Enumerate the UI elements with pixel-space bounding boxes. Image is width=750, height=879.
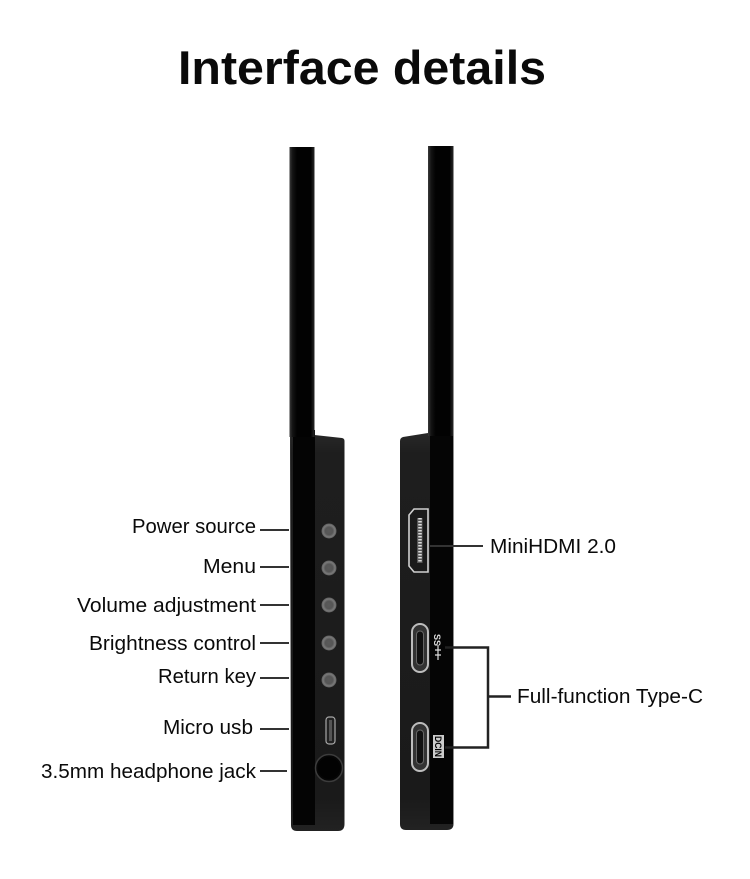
left device lower body: [290, 425, 344, 831]
power source button: [322, 524, 336, 538]
ss usb marking: SS: [432, 634, 442, 646]
right device black band: [430, 430, 453, 824]
micro usb port: [326, 717, 335, 744]
left device: button side: [290, 147, 344, 831]
callout: micro usb: Micro usb: [163, 717, 253, 739]
usb-c port 2: [412, 723, 428, 771]
headphone jack: [316, 754, 342, 782]
callout: menu: Menu: [203, 556, 256, 578]
left device screen strip: [290, 147, 314, 437]
usb-c port 1: [412, 624, 428, 672]
dc in marking: DCIN: [433, 736, 443, 757]
title: Interface details: [178, 41, 546, 94]
right device: port side: [400, 146, 454, 830]
callout: micro usb: [163, 717, 289, 739]
ss usb marking: [432, 634, 442, 660]
callout: headphone jack: 3.5mm headphone jack: [41, 761, 257, 783]
right device lower body: [400, 425, 454, 830]
callout: mini hdmi: MiniHDMI 2.0: [490, 536, 616, 558]
callout: volume adjustment: Volume adjustment: [77, 595, 256, 617]
menu button: [322, 560, 336, 576]
left device black band: [293, 430, 315, 825]
callout: full-function type-c bracket: Full-function Type-C: [517, 686, 703, 708]
callout: return key: Return key: [158, 666, 256, 688]
brightness button: [322, 636, 336, 650]
mini hdmi port: [409, 509, 428, 572]
callout: brightness control: Brightness control: [89, 633, 256, 655]
callout: full-function type-c bracket: [445, 648, 703, 748]
right device screen strip: [428, 146, 454, 436]
volume button: [322, 598, 336, 612]
callout: power source: Power source: [132, 516, 256, 538]
return button: [322, 672, 336, 688]
callout: menu: [203, 556, 289, 578]
